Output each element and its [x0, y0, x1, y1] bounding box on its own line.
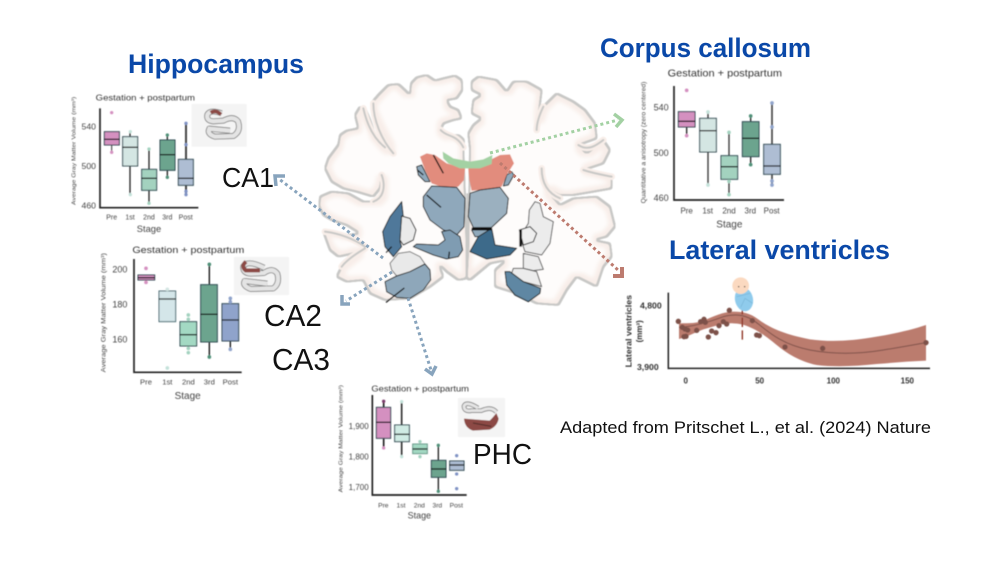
x labels [140, 378, 239, 387]
corpus callosum highlight [443, 152, 492, 168]
y axis label: Average Gray Matter Volume (mm³) [72, 97, 78, 205]
heading: Corpus callosum: Corpus callosum [600, 33, 811, 63]
x labels [378, 502, 463, 509]
y axis label: Average Gray Matter Volume (mm³) [339, 385, 345, 492]
x ticks: 50 [755, 376, 765, 385]
highlighted parahippocampal region [464, 413, 499, 431]
y ticks: 500 [654, 148, 669, 158]
box: 2nd [721, 130, 738, 196]
x labels [680, 206, 780, 215]
x labels: 3rd [162, 214, 172, 221]
box: 3rd [201, 262, 217, 359]
x labels: Pre [680, 206, 693, 215]
y ticks: 540 [654, 102, 669, 112]
region divider lines [386, 155, 521, 302]
label: PHC: PHC [473, 439, 532, 471]
box: Pre [376, 400, 391, 450]
box: 2nd [142, 147, 157, 205]
y ticks: 1,900 [349, 422, 369, 431]
y ticks: 160 [112, 335, 127, 345]
y axis label: Average Gray Matter Volume (mm³) [101, 253, 108, 372]
x labels: Pre [378, 502, 389, 509]
x labels: 2nd [722, 206, 736, 215]
chart: PHC box plot [339, 384, 469, 521]
confidence band [679, 312, 926, 366]
x labels: 1st [125, 214, 135, 221]
highlighted subfield [211, 111, 221, 115]
x ticks [683, 376, 915, 385]
x ticks: 100 [827, 376, 841, 385]
fitted line [679, 315, 926, 353]
axes [100, 108, 198, 208]
y ticks: 540 [82, 122, 96, 132]
box: 1st [395, 400, 409, 458]
box: 1st [123, 130, 138, 196]
x labels: 1st [702, 206, 714, 215]
y ticks [82, 122, 96, 211]
arrow: ventricles to chart [500, 163, 622, 276]
axes [668, 293, 930, 368]
y ticks: 3,900 [637, 362, 659, 372]
chart: CA1 box plot [72, 92, 198, 234]
label: CA2: CA2 [264, 298, 322, 333]
x axis title: Stage [175, 391, 201, 402]
box: Post [450, 454, 464, 490]
box: Post [222, 296, 239, 351]
x labels: Post [764, 206, 780, 215]
y ticks: 1,800 [349, 452, 369, 461]
y axis label: Quantitative a anisotropy (zero centered) [642, 82, 648, 203]
y ticks: 460 [82, 201, 96, 211]
y ticks: 1,700 [349, 483, 369, 492]
y ticks: 460 [654, 193, 669, 203]
heading: Lateral ventricles: Lateral ventricles [669, 235, 890, 265]
box: Post [764, 101, 780, 187]
x labels: 3rd [433, 502, 442, 509]
axes [674, 86, 784, 200]
citation: Adapted from Pritschet L., et al. (2024) Nature [560, 419, 931, 437]
chart title: Gestation + postpartum [371, 384, 469, 394]
chart title: Gestation + postpartum [132, 245, 245, 255]
box: Pre [138, 266, 155, 284]
chart: corpus callosum box plot [642, 69, 784, 231]
brain regions [383, 153, 553, 302]
x axis title: Stage [408, 511, 431, 521]
arrow: corpus callosum to chart [490, 114, 622, 153]
y axis unit: (mm³) [635, 320, 644, 342]
box: 1st [700, 110, 716, 187]
highlighted subfield [243, 262, 260, 270]
y ticks [654, 102, 669, 203]
label: CA3: CA3 [272, 342, 330, 377]
x labels: Post [450, 502, 463, 509]
x labels: Post [223, 378, 239, 387]
arrow: hippocampus to CA1 [275, 176, 383, 258]
box: 1st [159, 287, 176, 370]
x ticks: 150 [901, 376, 915, 385]
y ticks [112, 264, 127, 345]
thumbnail: CA1 location [192, 104, 247, 147]
x labels: 1st [397, 502, 406, 509]
chart title: Gestation + postpartum [96, 92, 195, 102]
y ticks: 500 [82, 161, 96, 171]
x labels: 2nd [143, 214, 155, 221]
chart: CA2 CA3 box plot [101, 245, 245, 402]
left hemisphere [319, 75, 467, 300]
x labels: Pre [106, 214, 117, 221]
x labels: 3rd [204, 378, 215, 387]
x labels: Pre [140, 378, 152, 387]
thumbnail: PHC location [458, 398, 505, 437]
data points [676, 308, 929, 351]
illustration: brain cross-section [319, 75, 615, 305]
box: Pre [678, 88, 695, 137]
y ticks: 4,800 [640, 301, 662, 311]
x ticks: 0 [683, 376, 688, 385]
x labels [106, 214, 193, 221]
icon: swaddled baby [732, 277, 755, 313]
x labels: Post [179, 214, 193, 221]
sulci halo [325, 103, 612, 267]
chart title: Gestation + postpartum [668, 69, 782, 80]
x axis title: Stage [137, 224, 161, 234]
midline [464, 193, 470, 267]
y ticks: 200 [112, 264, 127, 274]
x labels: 3rd [745, 206, 756, 215]
y axis title: Lateral ventricles [624, 294, 633, 367]
box: 2nd [413, 440, 427, 458]
box: Pre [104, 111, 119, 154]
axes [372, 395, 467, 495]
y ticks [637, 301, 662, 372]
thumbnail: CA2 CA3 location [234, 257, 289, 295]
birth marker [740, 305, 744, 340]
arrow: hippocampus to CA2 CA3 [342, 272, 392, 304]
label: CA1: CA1 [222, 162, 274, 193]
x labels: 2nd [414, 502, 425, 509]
x labels: 1st [162, 378, 173, 387]
sulci lines [325, 103, 612, 267]
box: 3rd [742, 114, 759, 166]
x labels: 2nd [182, 378, 195, 387]
heading: Hippocampus: Hippocampus [128, 49, 304, 79]
y ticks [349, 422, 369, 492]
box: 2nd [180, 313, 197, 354]
axes [134, 259, 242, 372]
y ticks: 180 [112, 300, 127, 310]
chart: lateral ventricles trajectory [624, 277, 930, 385]
arrow: hippocampus to PHC [408, 298, 436, 374]
box: 3rd [160, 133, 175, 179]
right hemisphere [467, 77, 615, 305]
box: Post [178, 122, 193, 196]
box: 3rd [431, 444, 446, 493]
x axis title: Stage [716, 220, 743, 231]
